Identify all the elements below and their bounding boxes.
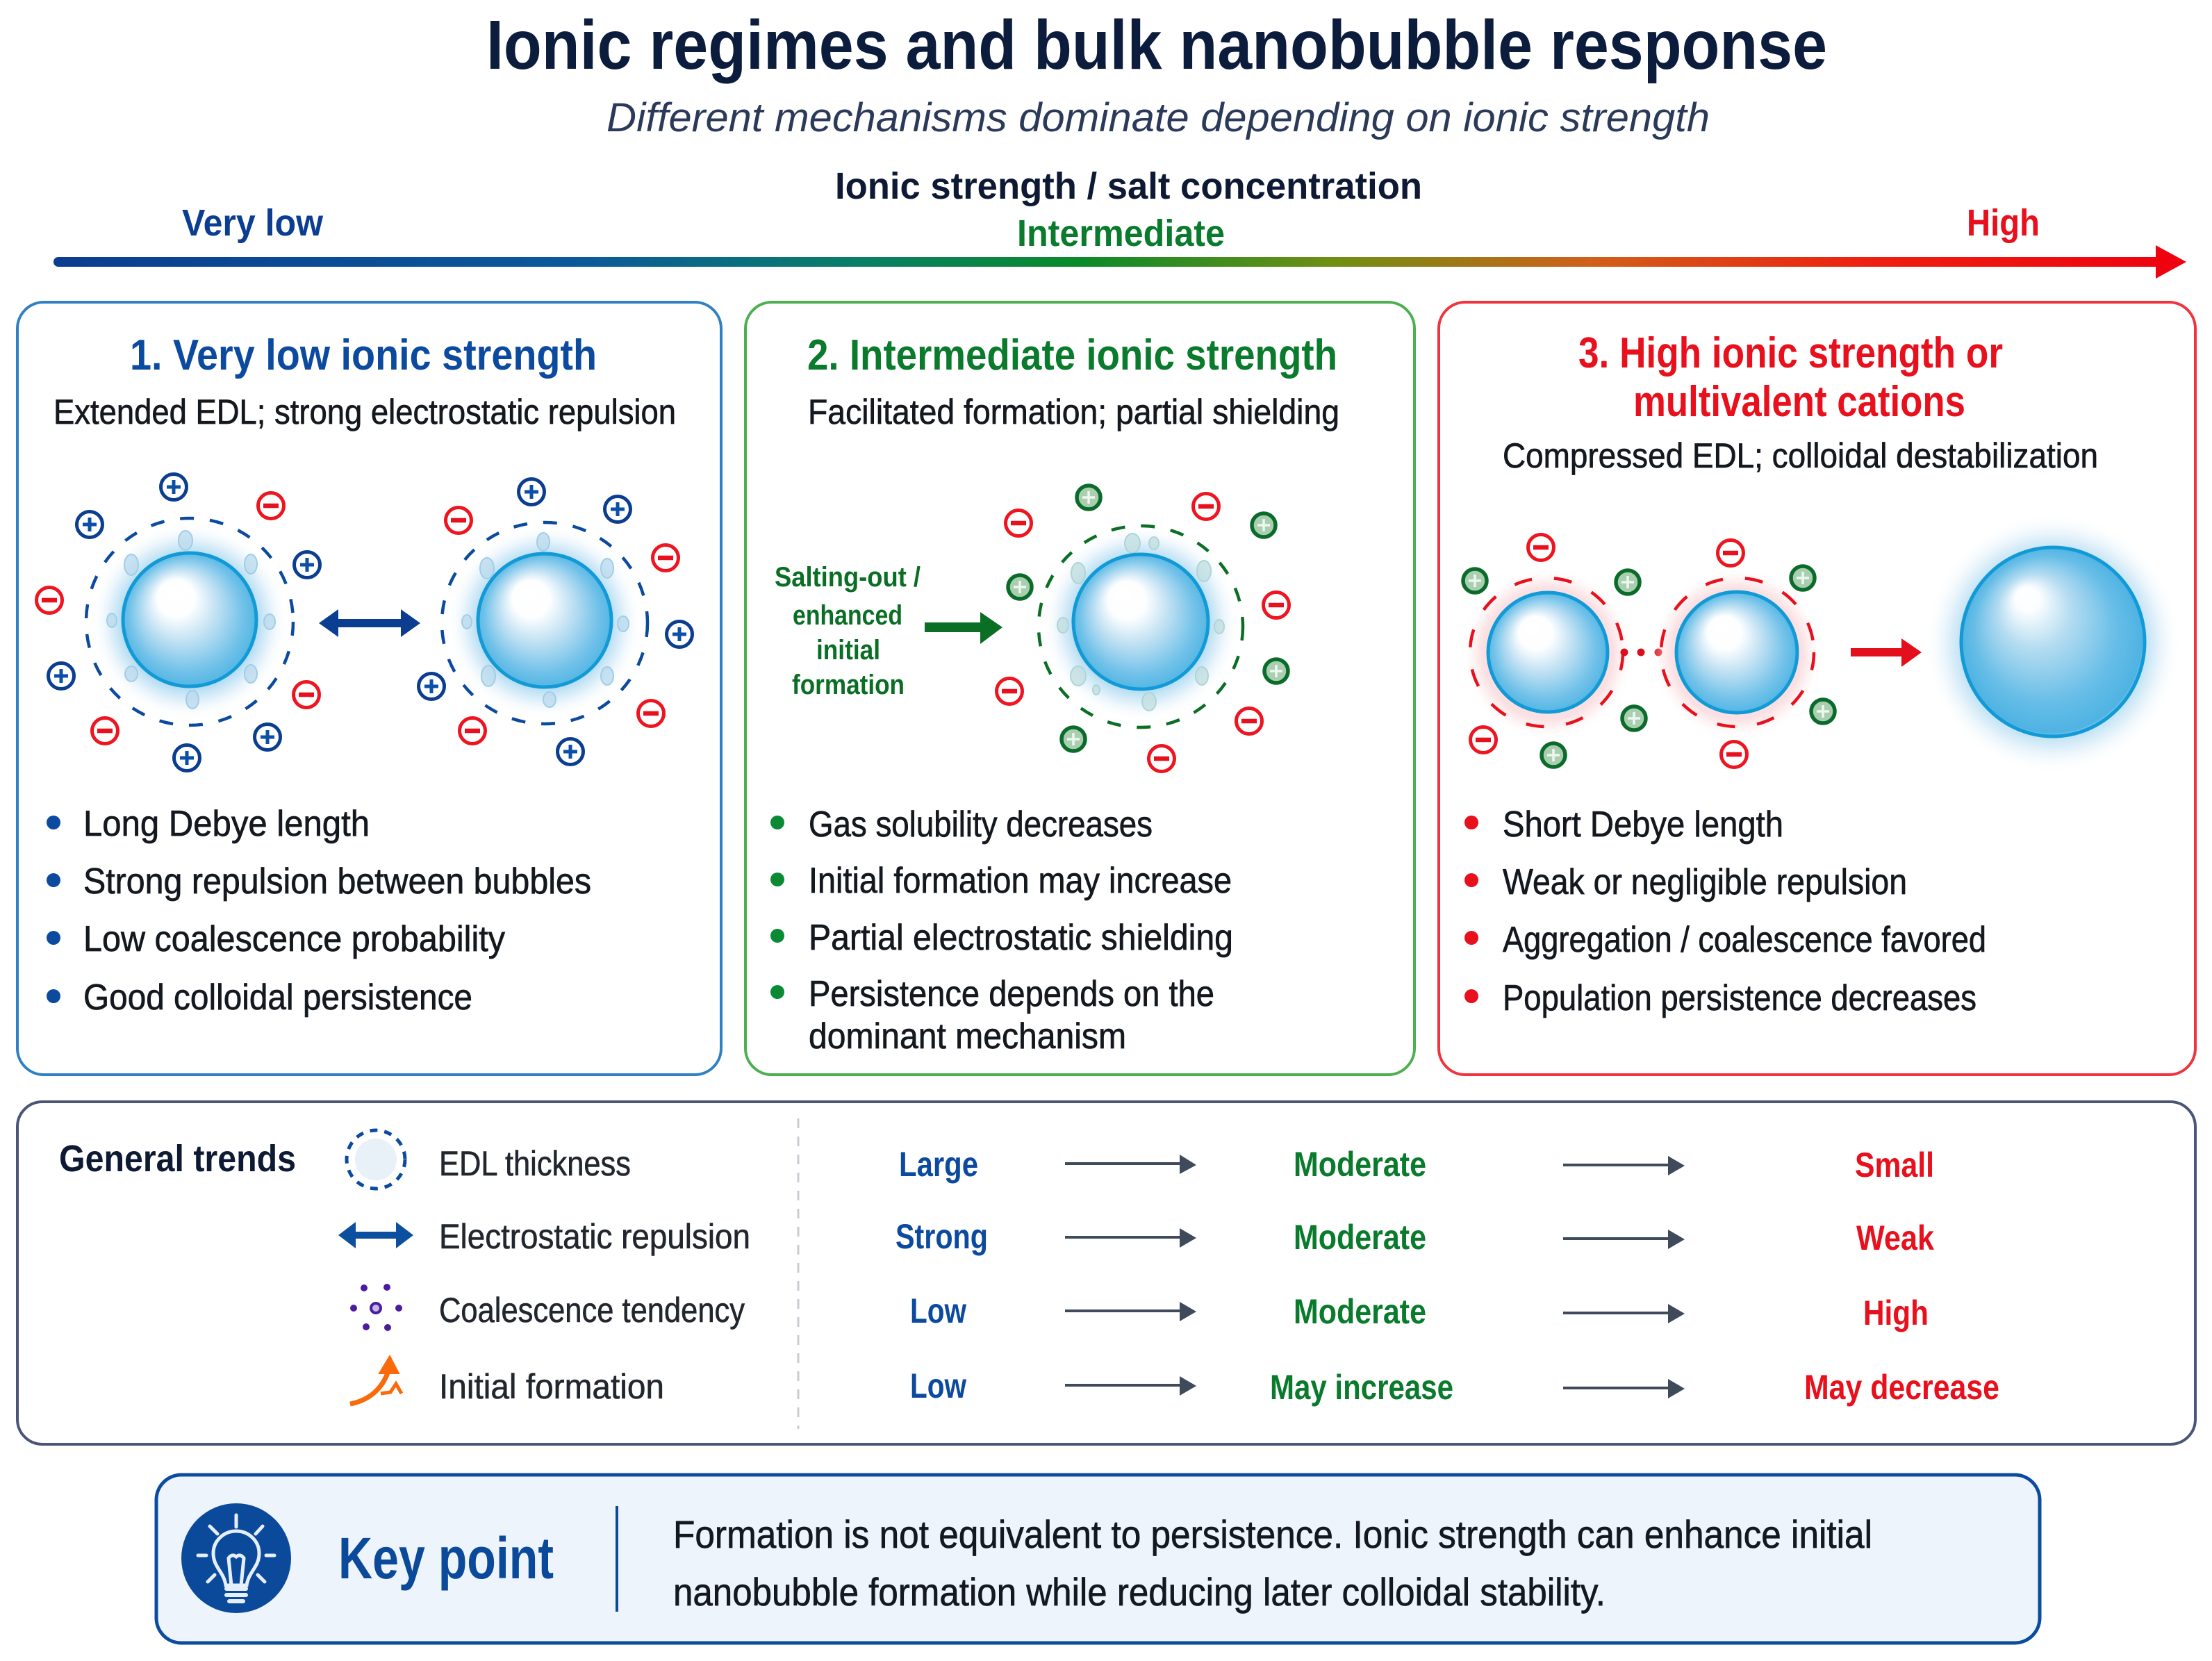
salting-out label: initial <box>816 635 880 666</box>
row: coalescence values: Moderate <box>1294 1292 1426 1331</box>
key point text: Formation is not equivalent to persistence. Ionic strength can enhance initial <box>673 1512 1872 1556</box>
row: coalescence values <box>910 1291 1929 1332</box>
row: initial formation values: May increase <box>1270 1368 1453 1407</box>
panel 1 bullet list <box>47 804 591 1018</box>
key point text <box>673 1512 1872 1614</box>
key point text: nanobubble formation while reducing later colloidal stability. <box>673 1570 1606 1614</box>
title: Ionic regimes and bulk nanobubble response <box>486 6 1827 84</box>
row: electrostatic repulsion values: Strong <box>895 1217 988 1256</box>
ions around central bubble <box>996 486 1289 771</box>
panel 2 subheading: Facilitated formation; partial shielding <box>808 392 1339 431</box>
panel 3 bullet list: Weak or negligible repulsion <box>1503 862 1907 902</box>
salting-out label: enhanced <box>793 600 902 631</box>
panel: very low ionic strength <box>17 302 721 1075</box>
label: electrostatic repulsion: Electrostatic repulsion <box>439 1217 750 1256</box>
label: EDL thickness: EDL thickness <box>439 1144 631 1183</box>
central bubble with EDL <box>1039 524 1243 727</box>
row: EDL thickness values: Moderate <box>1294 1145 1426 1184</box>
key point heading: Key point <box>338 1526 554 1591</box>
coalescence arrow <box>1851 638 1922 667</box>
panel 1 bullet list: Strong repulsion between bubbles <box>83 861 591 902</box>
axis label: very low: Very low <box>182 202 324 244</box>
panel: intermediate ionic strength <box>745 302 1414 1075</box>
row: electrostatic repulsion values: Weak <box>1856 1218 1934 1257</box>
panel 3 heading <box>1578 329 2003 426</box>
panel 3 bullet list: Short Debye length <box>1503 804 1783 845</box>
row: electrostatic repulsion values: Moderate <box>1294 1218 1426 1257</box>
panel 2 bullet list <box>770 804 1233 1057</box>
panel 2 heading: 2. Intermediate ionic strength <box>807 331 1337 379</box>
left bubble with EDL <box>86 518 293 725</box>
axis label: high: High <box>1967 202 2040 244</box>
panel 1 bullet list: Good colloidal persistence <box>83 977 472 1018</box>
ions around right bubble <box>418 479 692 764</box>
row: EDL thickness values <box>899 1145 1934 1184</box>
panel: high ionic strength <box>1439 302 2195 1075</box>
panel 2 bullet list: dominant mechanism <box>809 1016 1126 1057</box>
compressed bubble A <box>1462 568 1634 740</box>
formation arrow <box>925 612 1002 644</box>
compressed bubble B <box>1651 568 1823 740</box>
axis label: intermediate: Intermediate <box>1017 213 1225 254</box>
right bubble with EDL <box>442 522 647 724</box>
coalesced large bubble <box>1924 513 2181 774</box>
row: coalescence values: High <box>1863 1294 1929 1332</box>
row: initial formation values: May decrease <box>1804 1368 1999 1407</box>
panel 3 bullet list: Aggregation / coalescence favored <box>1503 920 1986 960</box>
label: initial formation: Initial formation <box>439 1367 664 1406</box>
gradient arrow <box>53 245 2186 279</box>
panel 1 subheading: Extended EDL; strong electrostatic repulsion <box>53 392 676 431</box>
salting-out label <box>775 562 921 700</box>
axis title: Ionic strength / salt concentration <box>835 165 1422 207</box>
icon: EDL thickness <box>347 1130 405 1189</box>
repulsion double arrow <box>319 609 420 637</box>
icon: repulsion arrow <box>338 1222 413 1248</box>
panel 2 bullet list: Persistence depends on the <box>809 974 1214 1014</box>
row: EDL thickness values: Large <box>899 1145 978 1184</box>
panel 2 bullet list: Partial electrostatic shielding <box>809 918 1233 958</box>
panel 1 heading: 1. Very low ionic strength <box>130 331 597 379</box>
panel 3 subheading: Compressed EDL; colloidal destabilization <box>1503 436 2098 475</box>
ionic strength axis <box>53 165 2186 279</box>
panel 3 heading: 3. High ionic strength or <box>1578 329 2003 377</box>
panel 3 bullet list <box>1464 804 1986 1018</box>
ions around left bubble <box>36 474 320 771</box>
panel 3 bullet list: Population persistence decreases <box>1503 978 1976 1018</box>
icon: initial formation <box>350 1356 402 1404</box>
salting-out label: formation <box>792 670 905 700</box>
row: electrostatic repulsion values <box>895 1217 1934 1257</box>
salting-out label: Salting-out / <box>775 562 921 593</box>
label: coalescence tendency: Coalescence tendency <box>439 1291 745 1330</box>
row: initial formation values: Low <box>910 1366 966 1405</box>
icon: coalescence dots <box>350 1284 402 1331</box>
row: initial formation values <box>910 1366 1999 1407</box>
icon: light bulb <box>181 1503 291 1613</box>
panel 3 heading: multivalent cations <box>1633 378 1965 426</box>
panel: general trends <box>17 1102 2195 1444</box>
key point box <box>156 1475 2040 1643</box>
trends heading: General trends <box>59 1138 296 1180</box>
panel 1 bullet list: Low coalescence probability <box>83 919 505 959</box>
panel 2 bullet list: Gas solubility decreases <box>809 804 1153 845</box>
panel 1 bullet list: Long Debye length <box>83 804 370 844</box>
contact dots <box>1620 649 1662 656</box>
panel 2 bullet list: Initial formation may increase <box>809 861 1232 901</box>
ions around compressed bubbles <box>1463 535 1835 767</box>
row: coalescence values: Low <box>910 1291 966 1330</box>
subtitle: Different mechanisms dominate depending on ionic strength <box>606 95 1710 140</box>
row: EDL thickness values: Small <box>1855 1146 1934 1184</box>
